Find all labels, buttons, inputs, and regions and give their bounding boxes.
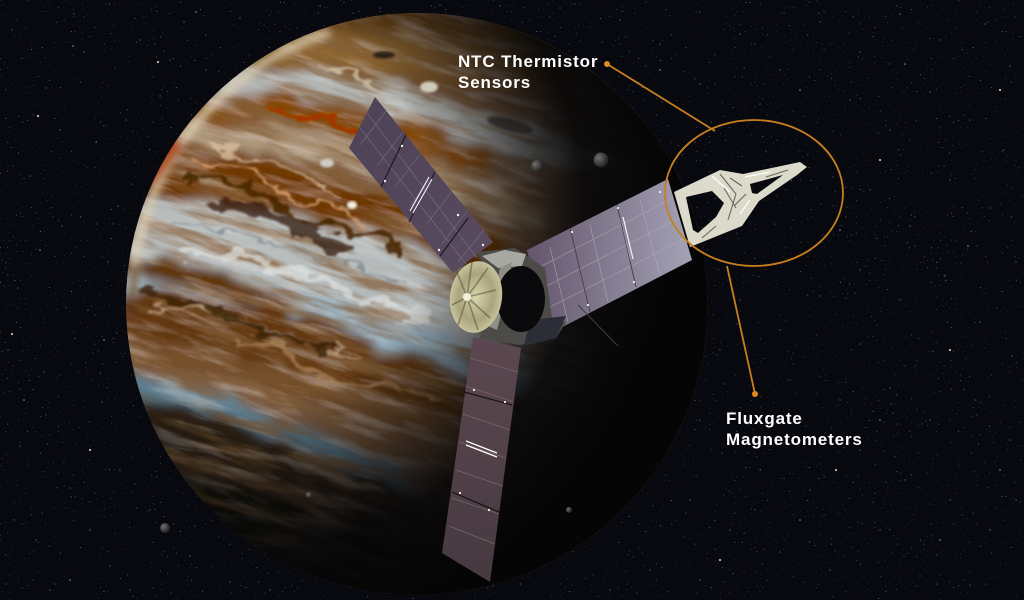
label: Fluxgate Magnetometers: Magnetometers bbox=[726, 430, 863, 449]
solar panel: lower bbox=[442, 337, 521, 582]
cloud surface bbox=[100, 13, 708, 596]
swirls bbox=[135, 65, 440, 400]
boom: magnetometer boom bbox=[674, 162, 807, 247]
solar panel: right bbox=[527, 179, 692, 335]
limb glow and orange storm edge bbox=[130, 32, 330, 320]
leader: NTC Thermistor Sensors bbox=[604, 61, 715, 131]
terminator shadow bbox=[126, 13, 708, 595]
callout: ellipse around boom bbox=[665, 120, 843, 266]
leader: Fluxgate Magnetometers bbox=[727, 266, 758, 397]
solar panel: upper left bbox=[349, 97, 493, 273]
antenna dish bbox=[445, 258, 507, 336]
planet: Jupiter bbox=[100, 13, 708, 596]
label: Fluxgate Magnetometers: Fluxgate bbox=[726, 409, 803, 428]
spacecraft body bbox=[478, 248, 618, 346]
label: NTC Thermistor Sensors: Sensors bbox=[458, 73, 531, 92]
label: NTC Thermistor Sensors: NTC Thermistor bbox=[458, 52, 598, 71]
storm spots bbox=[320, 52, 535, 209]
fine cloud texture bbox=[126, 13, 708, 595]
moons bbox=[160, 152, 608, 533]
